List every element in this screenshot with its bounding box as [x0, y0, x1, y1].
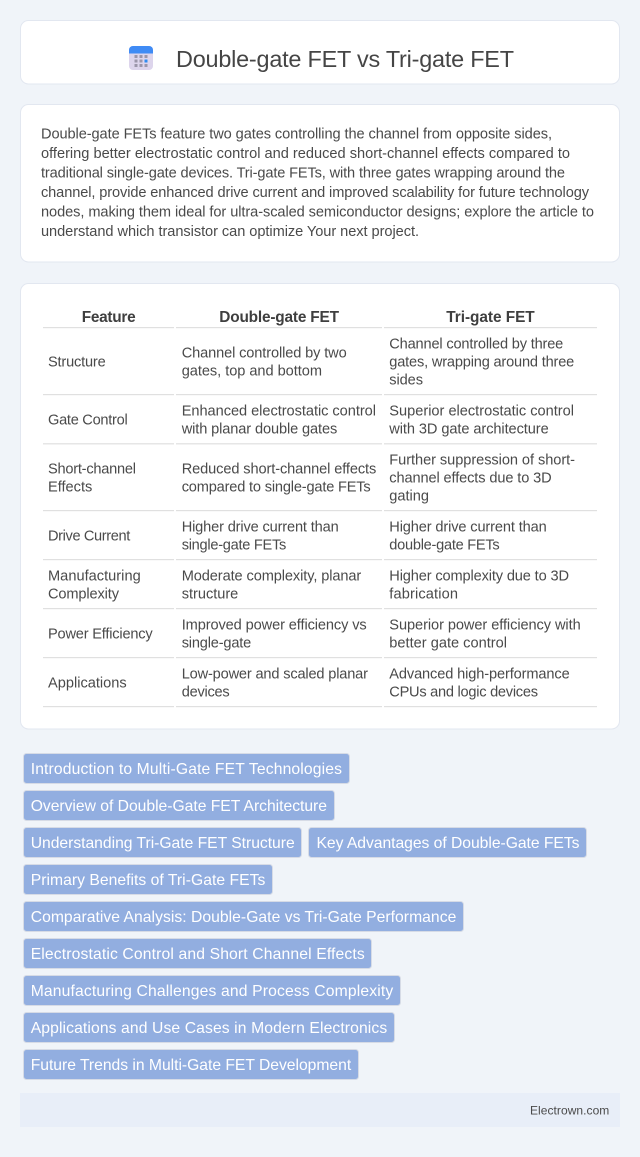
row: gate control: with 3D gate architecture: [388, 422, 549, 438]
row: drive current: Drive Current: [48, 529, 130, 545]
tag: electrostatic control: [24, 938, 372, 968]
intro text: channel, provide enhanced drive current and improved scalability for future technology: [41, 185, 590, 201]
row: short-channel effects: channel effects due to 3D: [389, 471, 552, 487]
table header row: Tri-gate FET: [446, 309, 535, 326]
intro text: traditional single-gate devices. Tri-gate FETs, with three gates wrapping around the: [41, 165, 565, 181]
tag: key advantages: Key Advantages of Double-Gate FETs: [316, 835, 580, 852]
row: applications: [43, 667, 597, 707]
row: short-channel effects: [43, 453, 597, 511]
row: gate control: with planar double gates: [181, 422, 337, 438]
icon: calendar: [129, 46, 153, 70]
row: power efficiency: better gate control: [389, 636, 507, 652]
row: short-channel effects: compared to single-gate FETs: [182, 480, 371, 496]
row: manufacturing complexity: Higher complexity due to 3D: [389, 569, 569, 585]
row: power efficiency: Superior power efficiency with: [389, 618, 581, 634]
tag: introduction: Introduction to Multi-Gate FET Technologies: [31, 761, 342, 778]
row: manufacturing complexity: fabrication: [389, 587, 458, 603]
panel: intro paragraph: [20, 104, 620, 262]
row: short-channel effects: Further suppression of short-: [389, 453, 575, 469]
footer: [20, 1093, 620, 1127]
tag: comparative analysis: [24, 902, 464, 932]
row: short-channel effects: gating: [389, 489, 429, 505]
row: power efficiency: [43, 618, 597, 658]
intro text: [41, 126, 594, 240]
row: manufacturing complexity: structure: [182, 587, 238, 603]
row: applications: Applications: [48, 676, 127, 692]
row: applications: Advanced high-performance: [389, 667, 570, 683]
footer: Electrown.com: [530, 1103, 609, 1117]
panel: comparison table: [20, 284, 620, 729]
tag: applications: [24, 1012, 394, 1042]
row: applications: CPUs and logic devices: [389, 685, 538, 701]
tag: future trends: [24, 1050, 358, 1080]
table header row: Double-gate FET: [219, 309, 340, 326]
row: drive current: [43, 520, 597, 560]
panel: topic tags: [24, 754, 586, 1080]
row: drive current: Higher drive current than: [182, 520, 339, 536]
row: short-channel effects: Effects: [48, 480, 92, 496]
row: structure: Channel controlled by two: [182, 346, 347, 362]
row: gate control: Gate Control: [48, 413, 128, 429]
tag: tri-gate structure: Understanding Tri-Gate FET Structure: [31, 835, 295, 852]
row: power efficiency: Improved power efficiency vs: [182, 618, 367, 634]
row: applications: Low-power and scaled planar: [182, 667, 368, 683]
tag: manufacturing challenges: Manufacturing Challenges and Process Complexity: [31, 983, 393, 1000]
row: drive current: single-gate FETs: [182, 538, 286, 554]
row: drive current: double-gate FETs: [389, 538, 500, 554]
tag: tri-gate structure: [24, 828, 302, 858]
row: gate control: Superior electrostatic control: [389, 404, 574, 420]
tag: future trends: Future Trends in Multi-Gate FET Development: [31, 1057, 352, 1074]
row: short-channel effects: Reduced short-channel effects: [182, 462, 376, 478]
tag: overview: Overview of Double-Gate FET Architecture: [31, 798, 327, 815]
row: structure: gates, top and bottom: [182, 364, 322, 380]
panel: header: [20, 20, 620, 84]
table header row: Feature: [82, 309, 136, 326]
table header row: [43, 309, 597, 328]
row: gate control: [43, 404, 597, 444]
row: structure: gates, wrapping around three: [389, 355, 574, 371]
tag: comparative analysis: Comparative Analysis: Double-Gate vs Tri-Gate Performance: [31, 909, 457, 926]
row: gate control: Enhanced electrostatic control: [182, 404, 376, 420]
row: drive current: Higher drive current than: [389, 520, 547, 536]
row: structure: Structure: [48, 355, 106, 371]
intro text: understand which transistor can optimize Your next project.: [41, 224, 419, 240]
intro text: Double-gate FETs feature two gates controlling the channel from opposite sides,: [41, 126, 552, 142]
tag: electrostatic control: Electrostatic Control and Short Channel Effects: [31, 946, 365, 963]
tag: applications: Applications and Use Cases in Modern Electronics: [31, 1020, 387, 1037]
intro text: nodes, making them ideal for ultra-scaled semiconductor designs; explore the article to: [41, 204, 594, 220]
title: Double-gate FET vs Tri-gate FET: [176, 46, 514, 72]
tag: primary benefits: Primary Benefits of Tri-Gate FETs: [31, 872, 265, 889]
intro text: offering better electrostatic control and reduced short-channel effects compared to: [41, 146, 570, 162]
tag: introduction: [24, 754, 350, 784]
row: structure: Channel controlled by three: [389, 337, 563, 353]
tag: key advantages: [308, 828, 586, 858]
row: short-channel effects: Short-channel: [48, 462, 136, 478]
row: manufacturing complexity: [43, 569, 597, 609]
row: power efficiency: single-gate: [182, 636, 251, 652]
tag: manufacturing challenges: [24, 976, 400, 1006]
row: power efficiency: Power Efficiency: [48, 627, 153, 643]
tag: overview: [24, 790, 334, 820]
row: manufacturing complexity: Manufacturing: [48, 569, 141, 585]
tag: primary benefits: [24, 864, 272, 894]
row: applications: devices: [182, 685, 230, 701]
row: manufacturing complexity: Complexity: [48, 587, 120, 603]
row: structure: sides: [389, 373, 423, 389]
row: manufacturing complexity: Moderate complexity, planar: [182, 569, 361, 585]
row: structure: [43, 337, 597, 395]
